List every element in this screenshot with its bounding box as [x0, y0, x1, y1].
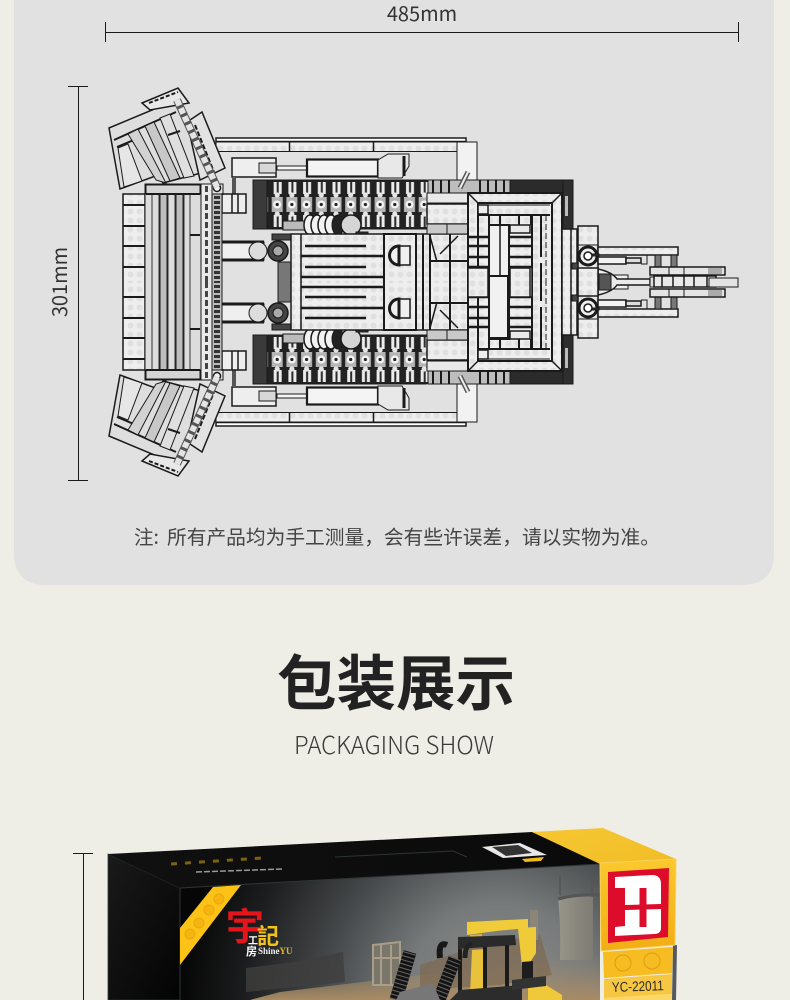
rusty ruins: [420, 935, 552, 990]
height label: 301mm: [44, 247, 73, 317]
brand logo: ShineYU: [258, 946, 293, 956]
measurement note: 注:: [134, 521, 159, 550]
box front picture: [180, 864, 600, 1000]
housing centre panels: [468, 268, 598, 338]
ripper centre rod: [598, 269, 738, 295]
box left face: [108, 854, 180, 1000]
brand panel: [600, 859, 676, 951]
yellow end of box top: [532, 828, 676, 864]
technical drawing: bulldozer top view: [109, 88, 738, 476]
box height dimension line: [73, 853, 93, 1000]
cooling tower: [558, 896, 593, 960]
central deck: [291, 234, 469, 290]
upper rear blocks: [427, 172, 468, 234]
ruined building left: [246, 952, 345, 992]
model number band: [604, 974, 672, 1000]
brand logo: 宇: [226, 896, 264, 951]
connector block: [222, 194, 246, 213]
center pusher arm: [222, 234, 292, 290]
ripper arm: [579, 247, 678, 268]
model number band: YC-22011: [612, 977, 664, 995]
hydraulic cylinder: [232, 154, 409, 195]
panel: dimensions: [14, 0, 774, 585]
ripper head: [650, 267, 725, 275]
blade: [123, 184, 223, 290]
track: [253, 180, 573, 229]
end-cap gray edge: [672, 945, 677, 1000]
lower half of model (mirror): [109, 274, 725, 476]
bulldozer model: [396, 919, 562, 1000]
brand logo: 房: [246, 943, 257, 959]
ruined frame right: [373, 942, 400, 985]
side wing: [109, 88, 225, 189]
box top decorations: [171, 843, 547, 872]
centre spine: [468, 268, 738, 338]
section title: 包装展示: [277, 636, 515, 723]
product box: [108, 828, 677, 1000]
ground: [250, 955, 600, 1000]
rear frame: [562, 226, 598, 290]
brand logo: 記: [257, 919, 279, 951]
height dimension line: [68, 86, 88, 481]
brand logo: [226, 896, 293, 959]
rear square housing: [468, 193, 562, 290]
measurement note: 所有产品均为手工测量，会有些许误差，请以实物为准。: [167, 521, 660, 550]
side rail: [216, 138, 477, 193]
width dimension line: [105, 22, 739, 42]
brand logo: 工: [248, 932, 258, 947]
steering spring: [283, 215, 368, 235]
stud plate: [603, 947, 673, 978]
upper half of model: [109, 88, 725, 290]
section subtitle: PACKAGING SHOW: [294, 726, 494, 762]
box top face: [108, 832, 605, 888]
corner ribbon: [180, 885, 241, 965]
